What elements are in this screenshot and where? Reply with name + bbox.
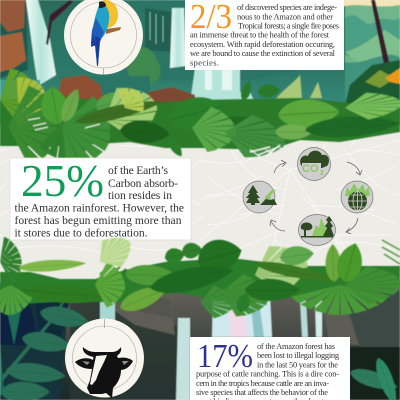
panel: upper foliage band [0,64,400,178]
chart: carbon cycle [243,148,373,246]
panel: top right text box [185,0,344,70]
text block: species: an immense threat to the health of the forest [190,31,330,40]
text block: species: Tropical forests; a single fire poses [238,22,339,30]
panel: middle background [0,125,400,285]
text block: cattle: of the Amazon forest has [257,342,335,351]
panel: bottom scene [0,283,400,400]
text block: cattle: been lost to illegal logging [257,351,340,360]
icon: macaw medallion [64,0,143,75]
icon: cow medallion [65,318,144,398]
text block: cattle: purpose of cattle ranching. This is a dire con- [196,370,339,379]
text block: carbon: it stores due to deforestation. [14,226,148,240]
white fern tips [250,145,280,156]
icon: CO2 cloud: 2 [320,170,324,177]
panel: bottom text box [190,337,350,400]
icon: felled tree [243,181,277,213]
panel: top jungle scene [0,0,400,125]
waterfall centre [170,8,186,68]
stat: 25%: 25% [21,155,104,206]
arrow: fire to tree [270,220,285,231]
text block: carbon: the Amazon rainforest. However, the [14,202,184,214]
text block: species [190,3,339,67]
stat: 17%: 17% [197,338,253,375]
white gap with fern [100,265,140,279]
text block: carbon: forest has begun emitting more than [14,214,182,227]
arrow: globe to fire [346,218,358,234]
panel: lower foliage band [0,228,400,321]
text block: carbon: tion resides in [108,189,172,202]
icon: burning globe [341,181,373,213]
text block: cattle: sive species that affects the behavior of the [196,388,328,397]
icon: CO2 cloud: CO [302,163,319,175]
text block: carbon: of the Earth’s [108,164,168,177]
text block: cattle [196,342,340,400]
waterfall left [26,0,56,86]
panel: middle text box [10,155,191,240]
text block: species: we are bound to cause the extinction of several [190,49,336,58]
text block: species: of discovered species are indege- [237,3,337,12]
text block: species: nous to the Amazon and other [237,12,333,21]
waterfall [212,295,272,337]
text block: carbon [14,164,184,240]
text block: cattle: in the last 50 years for the [257,360,338,369]
text block: species: ecosystem. With rapid deforestation occuring, [190,40,335,49]
icon: forest fire [298,214,336,246]
jungle leaves lower left [0,302,91,400]
icon: CO2 cloud [298,148,330,180]
arrow: CO2 to globe [347,162,362,175]
text block: cattle: cern in the tropics because cattle are an inva- [196,379,329,388]
arrow: tree to CO2 [274,160,286,173]
text block: species: species. [190,58,219,67]
text block: carbon: Carbon absorb- [108,177,178,190]
